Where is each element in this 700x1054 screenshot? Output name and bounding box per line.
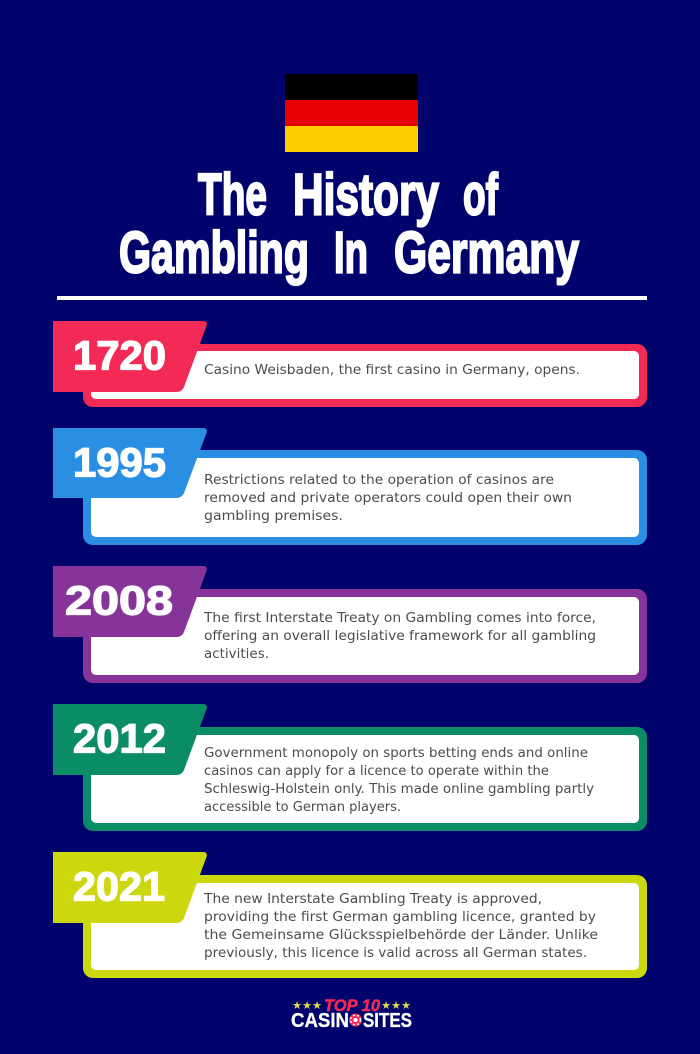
- logo: Top 10 Casino Sites: SITES: [363, 1010, 412, 1032]
- panel: 2008: The first Interstate Treaty on Gambling comes into force,: [203, 611, 596, 626]
- logo: Top 10 Casino Sites: ★: [401, 999, 411, 1012]
- panel: 2012: casinos can apply for a licence to operate within the: [204, 764, 549, 779]
- panel: 2021: the Gemeinsame Glücksspielbehörde der Länder. Unlike: [204, 928, 598, 943]
- title: Germany: [394, 220, 579, 286]
- title: Gambling: [119, 220, 309, 286]
- logo: Top 10 Casino Sites: [291, 996, 412, 1032]
- title: History: [293, 162, 439, 228]
- panel: 2021: providing the first German gambling licence, granted by: [204, 910, 596, 925]
- panel: 2021: previously, this licence is valid across all German states.: [204, 946, 587, 961]
- panel: 1995: [53, 428, 647, 545]
- panel: 1995: Restrictions related to the operation of casinos are: [204, 473, 554, 488]
- logo: Top 10 Casino Sites: ★: [302, 999, 312, 1012]
- title: of: [463, 162, 498, 228]
- panel: 2012: 2012: [73, 716, 166, 762]
- title: In: [334, 220, 368, 286]
- panel: 2021: 2021: [73, 864, 165, 910]
- panel: 2021: [53, 852, 647, 978]
- panel: 2008: [53, 566, 647, 683]
- panel: 2012: Government monopoly on sports betting ends and online: [204, 746, 588, 761]
- panel: 1720: [53, 321, 647, 407]
- icon: German flag: [285, 74, 418, 152]
- title: The: [198, 162, 267, 228]
- logo: Top 10 Casino Sites: ★: [391, 999, 401, 1012]
- logo: Top 10 Casino Sites: ★: [312, 999, 322, 1012]
- panel: 2021: The new Interstate Gambling Treaty is approved,: [203, 892, 542, 907]
- panel: 1995: removed and private operators could open their own: [204, 491, 572, 506]
- panel: 2008: activities.: [204, 647, 269, 662]
- panel: 2008: 2008: [65, 578, 173, 624]
- panel: 1995: gambling premises.: [204, 509, 343, 524]
- logo: Top 10 Casino Sites: TOP 10: [324, 996, 381, 1015]
- panel: 1995: 1995: [73, 440, 166, 486]
- panel: 2012: [53, 704, 647, 831]
- logo: Top 10 Casino Sites: CASIN: [291, 1010, 349, 1032]
- logo: Top 10 Casino Sites: ★: [381, 999, 391, 1012]
- panel: 1720: 1720: [73, 332, 166, 378]
- panel: 2012: accessible to German players.: [204, 800, 401, 815]
- panel: 1720: Casino Weisbaden, the first casino in Germany, opens.: [204, 363, 580, 378]
- panel: 2008: offering an overall legislative framework for all gambling: [204, 629, 596, 644]
- logo: Top 10 Casino Sites: ★: [292, 999, 302, 1012]
- panel: 2012: Schleswig-Holstein only. This made online gambling partly: [204, 782, 594, 797]
- title: [119, 162, 579, 286]
